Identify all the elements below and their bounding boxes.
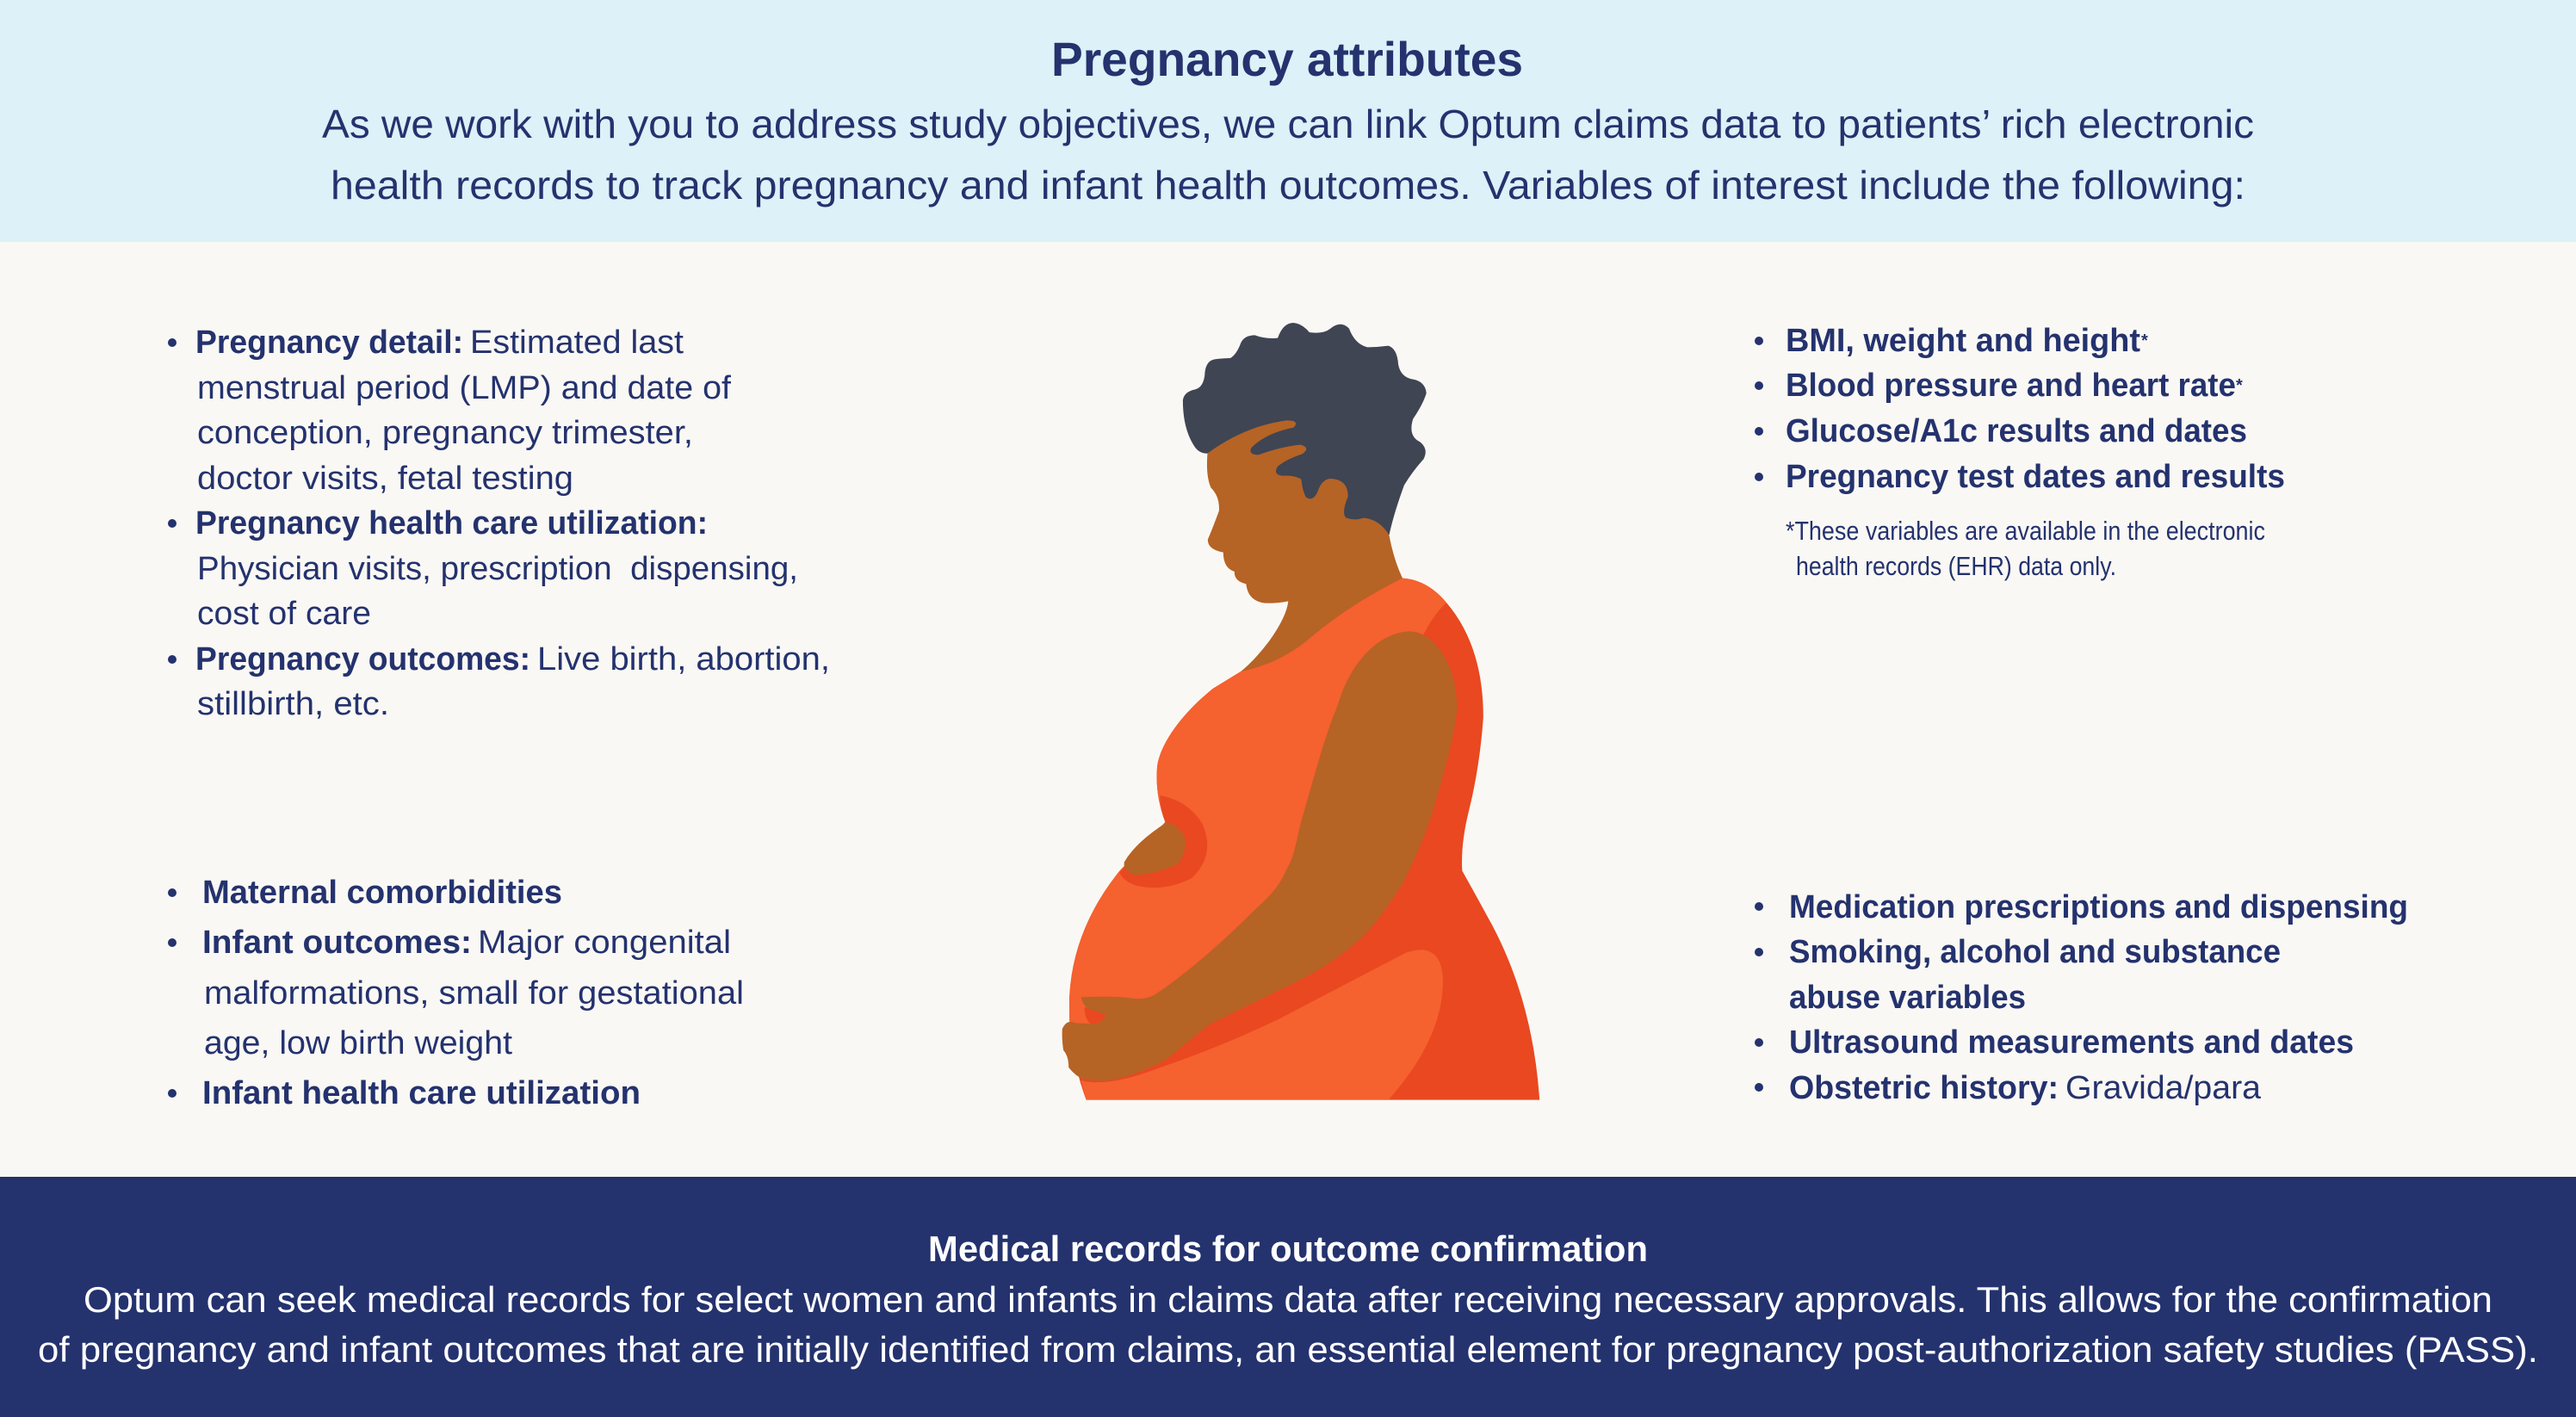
- text block: maternal and infant list: Infant health care utilization: [202, 1075, 641, 1111]
- text block: clinical measures list: [1755, 323, 2285, 581]
- text block: pregnancy details list: Pregnancy detail:: [195, 325, 463, 361]
- heading: Medical records for outcome confirmation: [928, 1228, 1648, 1269]
- text block: clinical measures list: BMI, weight and height: [1786, 323, 2140, 359]
- text block: pregnancy details list: stillbirth, etc.: [197, 686, 389, 722]
- hair: [1183, 323, 1427, 535]
- text block: medication and history list: [1755, 889, 2408, 1106]
- text block: clinical measures list: Blood pressure and heart rate: [1786, 368, 2236, 404]
- text block: pregnancy details list: cost of care: [197, 596, 371, 632]
- shadow under fingers: [1085, 1007, 1111, 1025]
- text block: pregnancy details list: [168, 325, 830, 722]
- text block: pregnancy details list: Physician visits, prescription dispensing,: [197, 551, 798, 587]
- body text: Optum can seek medical records for select women and infants in claims data after receiving necessary approvals. This allows for the confirmation: [84, 1279, 2492, 1320]
- text block: pregnancy details list: Live birth, abortion,: [537, 641, 830, 678]
- text block: pregnancy details list: doctor visits, fetal testing: [197, 461, 573, 497]
- title: Pregnancy attributes: [1051, 32, 1523, 86]
- intro text: [322, 102, 2254, 207]
- text block: medication and history list: Ultrasound measurements and dates: [1789, 1024, 2354, 1061]
- intro text: health records to track pregnancy and infant health outcomes. Variables of interest include the following:: [331, 163, 2245, 207]
- text block: pregnancy details list: Pregnancy outcomes:: [195, 641, 530, 678]
- dress: front panel: [1069, 579, 1446, 1027]
- dress: lower panel: [1081, 950, 1443, 1100]
- body text: of pregnancy and infant outcomes that are initially identified from claims, an essential element for pregnancy post-authorization safety studies (PASS).: [38, 1329, 2538, 1370]
- illustration: pregnant woman in profile: [1062, 323, 1539, 1100]
- panel: medical records band: [0, 1177, 2576, 1417]
- text block: pregnancy details list: conception, pregnancy trimester,: [197, 415, 693, 451]
- intro text: As we work with you to address study objectives, we can link Optum claims data to patients’ rich electronic: [322, 102, 2254, 146]
- text block: maternal and infant list: Infant outcomes:: [202, 925, 472, 961]
- text block: maternal and infant list: Maternal comorbidities: [202, 875, 562, 911]
- bust shadow: [1119, 795, 1207, 888]
- text block: pregnancy details list: Pregnancy health care utilization:: [195, 505, 708, 541]
- text block: pregnancy details list: menstrual period (LMP) and date of: [197, 370, 731, 406]
- text block: maternal and infant list: age, low birth weight: [204, 1025, 512, 1061]
- text block: medication and history list: abuse variables: [1789, 980, 2026, 1016]
- text block: clinical measures list: Glucose/A1c results and dates: [1786, 413, 2247, 449]
- text block: medication and history list: Obstetric history:: [1789, 1070, 2059, 1106]
- footnote: [1786, 516, 2265, 581]
- text block: maternal and infant list: malformations, small for gestational: [204, 975, 744, 1012]
- arm and hand: [1062, 631, 1457, 1081]
- text block: medication and history list: Medication prescriptions and dispensing: [1789, 889, 2408, 925]
- text block: medication and history list: Smoking, alcohol and substance: [1789, 934, 2281, 970]
- dress: back shading: [1069, 579, 1539, 1100]
- text block: maternal and infant list: Major congenital: [478, 925, 731, 961]
- panel: header band: [0, 0, 2576, 242]
- text block: maternal and infant list: [168, 875, 744, 1111]
- bust: [1124, 822, 1186, 876]
- text block: pregnancy details list: Estimated last: [470, 325, 684, 361]
- body text: [38, 1279, 2538, 1370]
- text block: medication and history list: Gravida/para: [2065, 1070, 2262, 1106]
- text block: clinical measures list: *: [2141, 331, 2148, 350]
- footnote: health records (EHR) data only.: [1796, 551, 2116, 581]
- head and neck: [1207, 416, 1403, 671]
- footnote: *These variables are available in the electronic: [1786, 516, 2265, 546]
- text block: clinical measures list: Pregnancy test dates and results: [1786, 459, 2285, 495]
- text block: clinical measures list: *: [2236, 376, 2243, 395]
